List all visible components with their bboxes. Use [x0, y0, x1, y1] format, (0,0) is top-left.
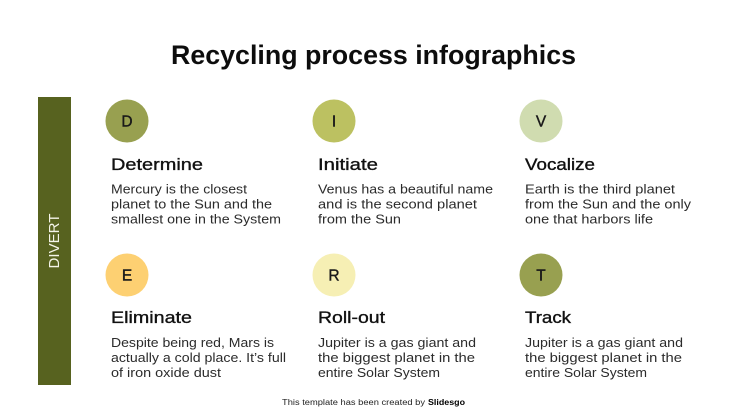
text: Track description: the biggest planet in the [525, 350, 682, 365]
icon: D circle: D [121, 114, 133, 130]
icon: I circle [312, 100, 356, 142]
step: initiate [312, 100, 493, 226]
text: Roll-out description: entire Solar System [318, 365, 440, 380]
footer credit: Slidesgo [428, 398, 465, 407]
text: Eliminate description: actually a cold place. It’s full [111, 350, 286, 365]
icon: T circle [520, 254, 562, 296]
icon: E circle [106, 254, 148, 296]
text: Track description: Jupiter is a gas giant and [525, 335, 683, 350]
text: Eliminate description: of iron oxide dust [111, 365, 221, 380]
icon: E circle: E [122, 268, 132, 284]
step: track [520, 254, 683, 380]
heading: Eliminate: Eliminate [111, 309, 192, 327]
heading: Track: Track [525, 309, 572, 327]
text: Vocalize description: Earth is the third planet [525, 182, 675, 196]
icon: V circle: V [536, 114, 547, 130]
text: Vocalize description: from the Sun and the only [525, 196, 692, 212]
heading: Vocalize: Vocalize [525, 156, 595, 174]
text: Track description [525, 335, 683, 380]
text: Initiate description: and is the second planet [318, 196, 477, 212]
text: Determine description: smallest one in the System [111, 212, 281, 226]
vertical bar: divert [38, 97, 71, 385]
text: Initiate description [318, 182, 493, 226]
text: Vocalize description: one that harbors life [525, 212, 653, 226]
text: Determine description: Mercury is the closest [111, 182, 247, 196]
vertical bar: divert: DIVERT [47, 213, 63, 268]
icon: T circle: T [536, 268, 546, 284]
text: Determine description [111, 182, 281, 226]
text: Track description: entire Solar System [525, 365, 647, 380]
heading: Initiate: Initiate [318, 156, 378, 174]
icon: I circle: I [332, 114, 336, 130]
heading: Roll-out: Roll-out [318, 309, 385, 327]
footer credit [282, 398, 465, 407]
text: Initiate description: Venus has a beautiful name [318, 182, 493, 196]
icon: D circle [106, 100, 148, 142]
text: Eliminate description: Despite being red, Mars is [111, 335, 275, 350]
step: vocalize [520, 100, 692, 226]
icon: V circle [520, 100, 562, 142]
step: determine [106, 100, 281, 226]
icon: R circle: R [328, 268, 340, 284]
text: Roll-out description: Jupiter is a gas giant and [318, 335, 476, 350]
heading: Determine: Determine [111, 156, 203, 174]
text: Determine description: planet to the Sun and the [111, 196, 272, 212]
text: Initiate description: from the Sun [318, 212, 401, 226]
icon: R circle [312, 254, 356, 296]
text: Eliminate description [111, 335, 286, 380]
step: roll-out [312, 254, 476, 380]
title: Recycling process infographics [171, 40, 576, 70]
footer credit: This template has been created by [282, 398, 425, 407]
text: Roll-out description [318, 335, 476, 380]
text: Roll-out description: the biggest planet in the [318, 350, 475, 365]
text: Vocalize description [525, 182, 692, 226]
step: eliminate [106, 254, 286, 380]
